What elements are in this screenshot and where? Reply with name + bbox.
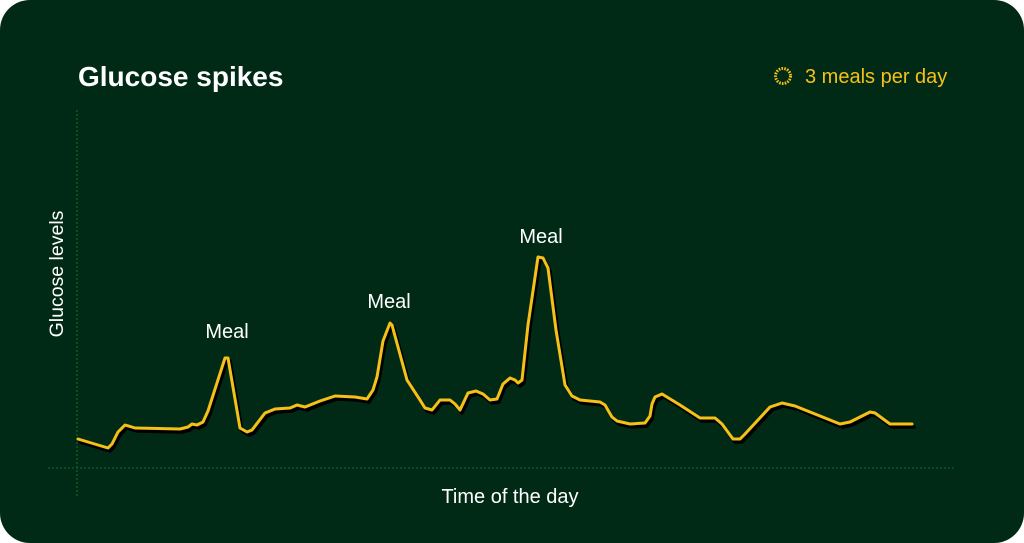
x-axis label: Time of the day [441, 486, 579, 508]
icon: sun ring [776, 68, 790, 84]
annotation: meal 2: Meal [367, 291, 411, 313]
glucose line chart [78, 257, 914, 451]
title: Glucose spikes [78, 61, 283, 92]
annotation: meal 1: Meal [205, 321, 249, 343]
legend: 3 meals per day: 3 meals per day [805, 66, 947, 88]
y-axis label: Glucose levels [46, 210, 68, 337]
annotation: meal 3: Meal [519, 226, 563, 248]
